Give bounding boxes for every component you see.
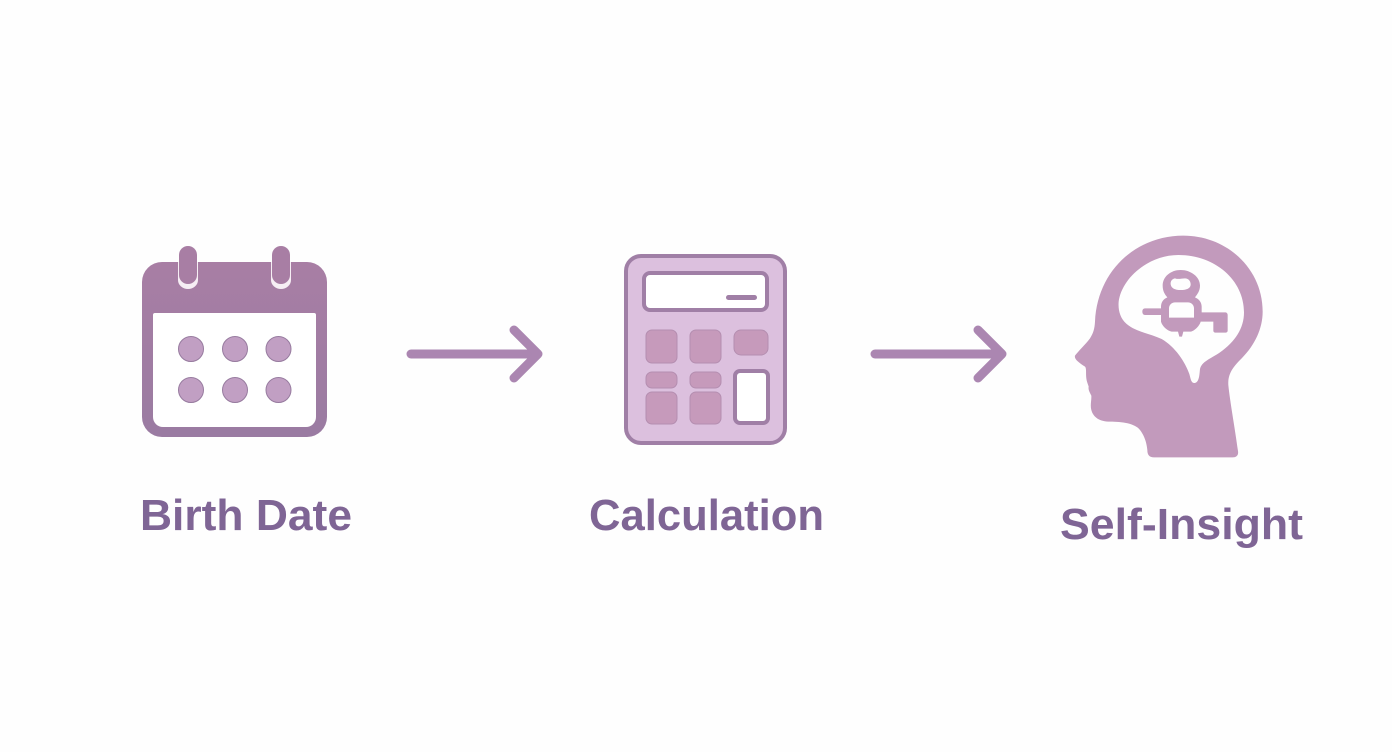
calendar date dots xyxy=(178,336,291,402)
calculator buttons xyxy=(646,330,768,424)
arrow: birth date to calculation xyxy=(411,330,538,378)
label: Self-Insight: Self-Insight xyxy=(1060,500,1303,549)
icon: head with brain and key xyxy=(1075,236,1263,457)
arrow: calculation to self-insight xyxy=(875,330,1002,378)
calculator display xyxy=(644,273,767,310)
calculator tall white key xyxy=(735,371,768,423)
icon: calculator xyxy=(626,256,785,443)
label: Calculation: Calculation xyxy=(589,491,824,540)
calendar binder rings xyxy=(178,246,291,289)
icon: calendar xyxy=(142,246,327,437)
key symbol inside brain xyxy=(1142,270,1228,337)
label: Birth Date: Birth Date xyxy=(140,491,352,540)
